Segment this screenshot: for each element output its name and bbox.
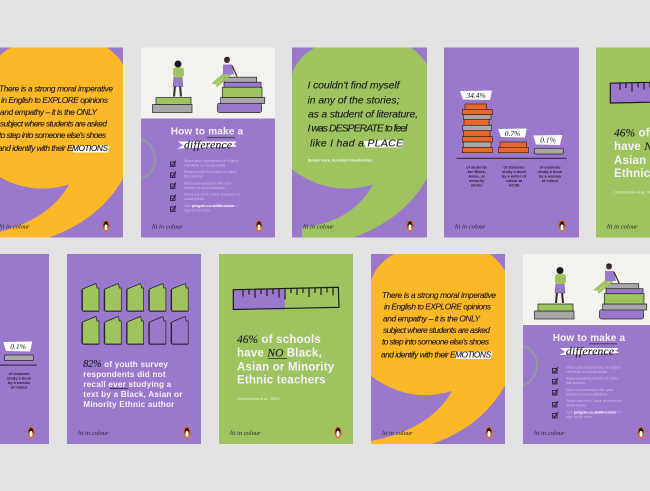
checklist: Read a book by a writer of colour	[566, 376, 620, 380]
right book stack with seated reader	[593, 263, 647, 319]
white highlight behind EMOTIONS	[455, 352, 492, 359]
statistic text: Ethnic teachers	[237, 375, 326, 387]
icon: penguin	[27, 427, 35, 438]
handwritten quote: in English to EXPLORE opinions	[384, 302, 491, 312]
stat labels: Asian, or	[468, 174, 486, 178]
handwritten quote: and empathy – it is the ONLY	[0, 107, 98, 117]
stat label	[7, 371, 32, 390]
stat labels: of students	[466, 164, 487, 170]
stat labels: minority	[469, 178, 485, 183]
checklist: sign up for more	[566, 415, 592, 419]
handwritten heading word: difference	[566, 346, 614, 358]
logo: lit in colour	[303, 224, 334, 230]
statistic text: have NO Black,	[237, 348, 322, 360]
ruler chart	[610, 81, 650, 103]
handwritten quote: to step into someone else's shoes	[0, 130, 106, 140]
logo: lit in colour	[152, 224, 183, 230]
checklist: social media	[566, 403, 586, 407]
stat labels: of students	[504, 164, 524, 170]
right book stack with seated reader	[211, 57, 265, 112]
underline below NO	[268, 357, 287, 360]
logo: lit in colour	[607, 224, 638, 230]
panel: how to make a difference, bottom right	[523, 254, 650, 444]
stat labels: GCSE	[508, 182, 520, 188]
handwritten quote: There is a strong moral imperative	[382, 290, 496, 300]
decorative scribble arc	[141, 140, 155, 178]
stat labels	[466, 164, 563, 188]
icon: penguin	[334, 427, 342, 438]
stat: 0.1%: 0.1%	[10, 342, 26, 351]
panel: 82% books poster	[67, 254, 201, 444]
attribution: Bennie Kara, Assistant Headteacher	[308, 158, 373, 162]
panel: book stack statistics	[444, 48, 579, 238]
checklist: Visit penguin.co.uk/litincolour to	[566, 410, 620, 414]
left book stack with standing reader	[152, 60, 192, 112]
statistic text	[83, 359, 183, 409]
stat label: of students	[9, 371, 29, 376]
illustration area	[523, 254, 650, 325]
handwritten quote: as a student of literature,	[308, 108, 418, 120]
statistic text	[614, 128, 650, 180]
stat labels: are Black,	[468, 169, 486, 174]
stat: 0.7%: 0.7%	[505, 129, 520, 138]
stat label: of colour	[11, 384, 28, 390]
checklist: Start a conversation with your	[566, 388, 614, 392]
handwritten quote: subject where students are asked	[383, 325, 490, 335]
decorative scribble arc	[523, 346, 537, 385]
checklist: Literature on social media	[566, 370, 607, 374]
stat labels: study a book	[502, 169, 527, 174]
handwritten quote: There is a strong moral imperative	[0, 84, 113, 94]
left book stack with standing reader	[534, 267, 574, 319]
statistic text: recall ever studying a	[83, 380, 172, 389]
logo: lit in colour	[534, 430, 565, 437]
checklist: teacher or school librarian	[566, 392, 607, 396]
citation: (Tereschenko et al., 2020)	[237, 397, 280, 401]
stat labels: colour at	[506, 178, 523, 183]
stat labels: by a woman	[539, 174, 562, 178]
pictogram: ten books, eight filled	[82, 284, 188, 344]
stat labels: by a writer of	[502, 174, 527, 178]
panel: 46% ruler poster, bottom	[219, 254, 353, 444]
underline below make	[589, 342, 617, 345]
handwritten quote: and identify with their EMOTIONS	[0, 143, 108, 153]
checklist	[170, 159, 240, 212]
stat: 0.7%	[498, 128, 528, 153]
stat labels: of colour	[542, 178, 559, 183]
white highlight behind PLACE	[363, 140, 403, 148]
stat: 34.4%: 34.4%	[465, 91, 486, 100]
icon: penguin	[102, 220, 110, 232]
handwritten quote: in any of the stories;	[308, 94, 400, 106]
yellow speech mark shape	[0, 48, 123, 238]
panel: 46% ruler poster, top right	[596, 48, 650, 238]
white highlight behind difference	[177, 142, 237, 148]
statistic text: 82% of youth survey	[83, 359, 168, 370]
checklist: Share the Lit in Colour research on	[184, 192, 240, 196]
stat label: study a book	[7, 376, 32, 380]
checklist: this summer	[566, 381, 586, 385]
stat: 0.1%	[533, 135, 563, 154]
stat label: by a woman	[8, 380, 31, 385]
handwritten quote: to step into someone else's shoes	[382, 337, 489, 347]
stat labels: of students	[540, 164, 560, 170]
panel: yellow quote poster, bottom	[371, 254, 505, 444]
statistic text: Asian or Minority	[237, 361, 335, 373]
checklist: Share your experiences of English	[184, 159, 239, 163]
handwritten quote: like I had a PLACE	[310, 138, 404, 150]
checklist: social media	[184, 197, 204, 201]
panel: yellow quote poster, top left	[0, 48, 123, 238]
checklist: teacher or school librarian	[184, 186, 225, 190]
white highlight behind EMOTIONS	[72, 145, 109, 152]
logo: lit in colour	[455, 224, 486, 230]
handwritten quote: I couldn't find myself	[308, 80, 401, 92]
icon: penguin	[183, 427, 191, 438]
handwritten quote: and empathy – it is the ONLY	[383, 313, 481, 323]
checklist: Literature on social media	[184, 163, 225, 167]
ruler chart	[233, 287, 339, 310]
checklist: Start a conversation with your	[184, 182, 232, 186]
checklist: Share your experiences of English	[566, 366, 621, 370]
icon: penguin	[255, 220, 263, 232]
icon: penguin	[637, 427, 645, 438]
icon: penguin	[485, 427, 493, 438]
checklist: Read a book by a writer of colour	[184, 170, 238, 174]
handwritten quote: subject where students are asked	[0, 118, 107, 128]
panel: green quote poster	[292, 48, 427, 238]
icon: penguin	[406, 220, 414, 232]
statistic text: Minority Ethnic author	[83, 400, 175, 409]
logo: lit in colour	[230, 430, 261, 437]
underline below ever	[110, 387, 128, 390]
panel: statistics poster cropped, bottom left	[0, 254, 49, 444]
statistic text: respondents did not	[83, 370, 166, 379]
stat labels: study a book	[538, 169, 563, 174]
handwritten quote: and identify with their EMOTIONS	[381, 350, 491, 360]
handwritten quote: in English to EXPLORE opinions	[1, 95, 108, 105]
logo: lit in colour	[382, 430, 413, 437]
yellow speech mark shape	[371, 254, 505, 444]
icon: penguin	[558, 220, 566, 232]
green speech mark shape	[292, 48, 427, 238]
panel: how to make a difference, top	[141, 48, 275, 238]
checklist: Visit penguin.co.uk/litincolour to	[184, 204, 238, 208]
white highlight behind difference	[559, 348, 619, 355]
statistic text: text by a Black, Asian or	[83, 390, 183, 399]
underline below make	[207, 136, 235, 139]
statistic text	[237, 334, 335, 387]
stat: 0.1%	[3, 342, 33, 360]
handwritten quote: I was DESPERATE to feel	[308, 122, 408, 134]
baseline	[0, 365, 37, 366]
baseline	[457, 158, 567, 159]
stat: 34.4%	[460, 90, 492, 153]
checklist: Share the Lit in Colour research on	[566, 399, 622, 403]
heading: How to make a	[553, 333, 626, 344]
stat labels: ethnic	[471, 182, 483, 188]
handwritten quote	[0, 84, 113, 153]
handwritten quote	[308, 80, 418, 150]
heading: How to make a	[171, 126, 244, 138]
checklist	[552, 366, 622, 419]
illustration area	[141, 48, 275, 118]
checklist: sign up for more	[184, 208, 210, 212]
stat: 0.1%: 0.1%	[540, 136, 556, 144]
statistic text: 46% of schools	[237, 334, 321, 346]
handwritten quote	[381, 290, 496, 360]
logo: lit in colour	[78, 430, 109, 437]
checklist: this summer	[184, 174, 204, 178]
handwritten heading word: difference	[184, 140, 232, 152]
